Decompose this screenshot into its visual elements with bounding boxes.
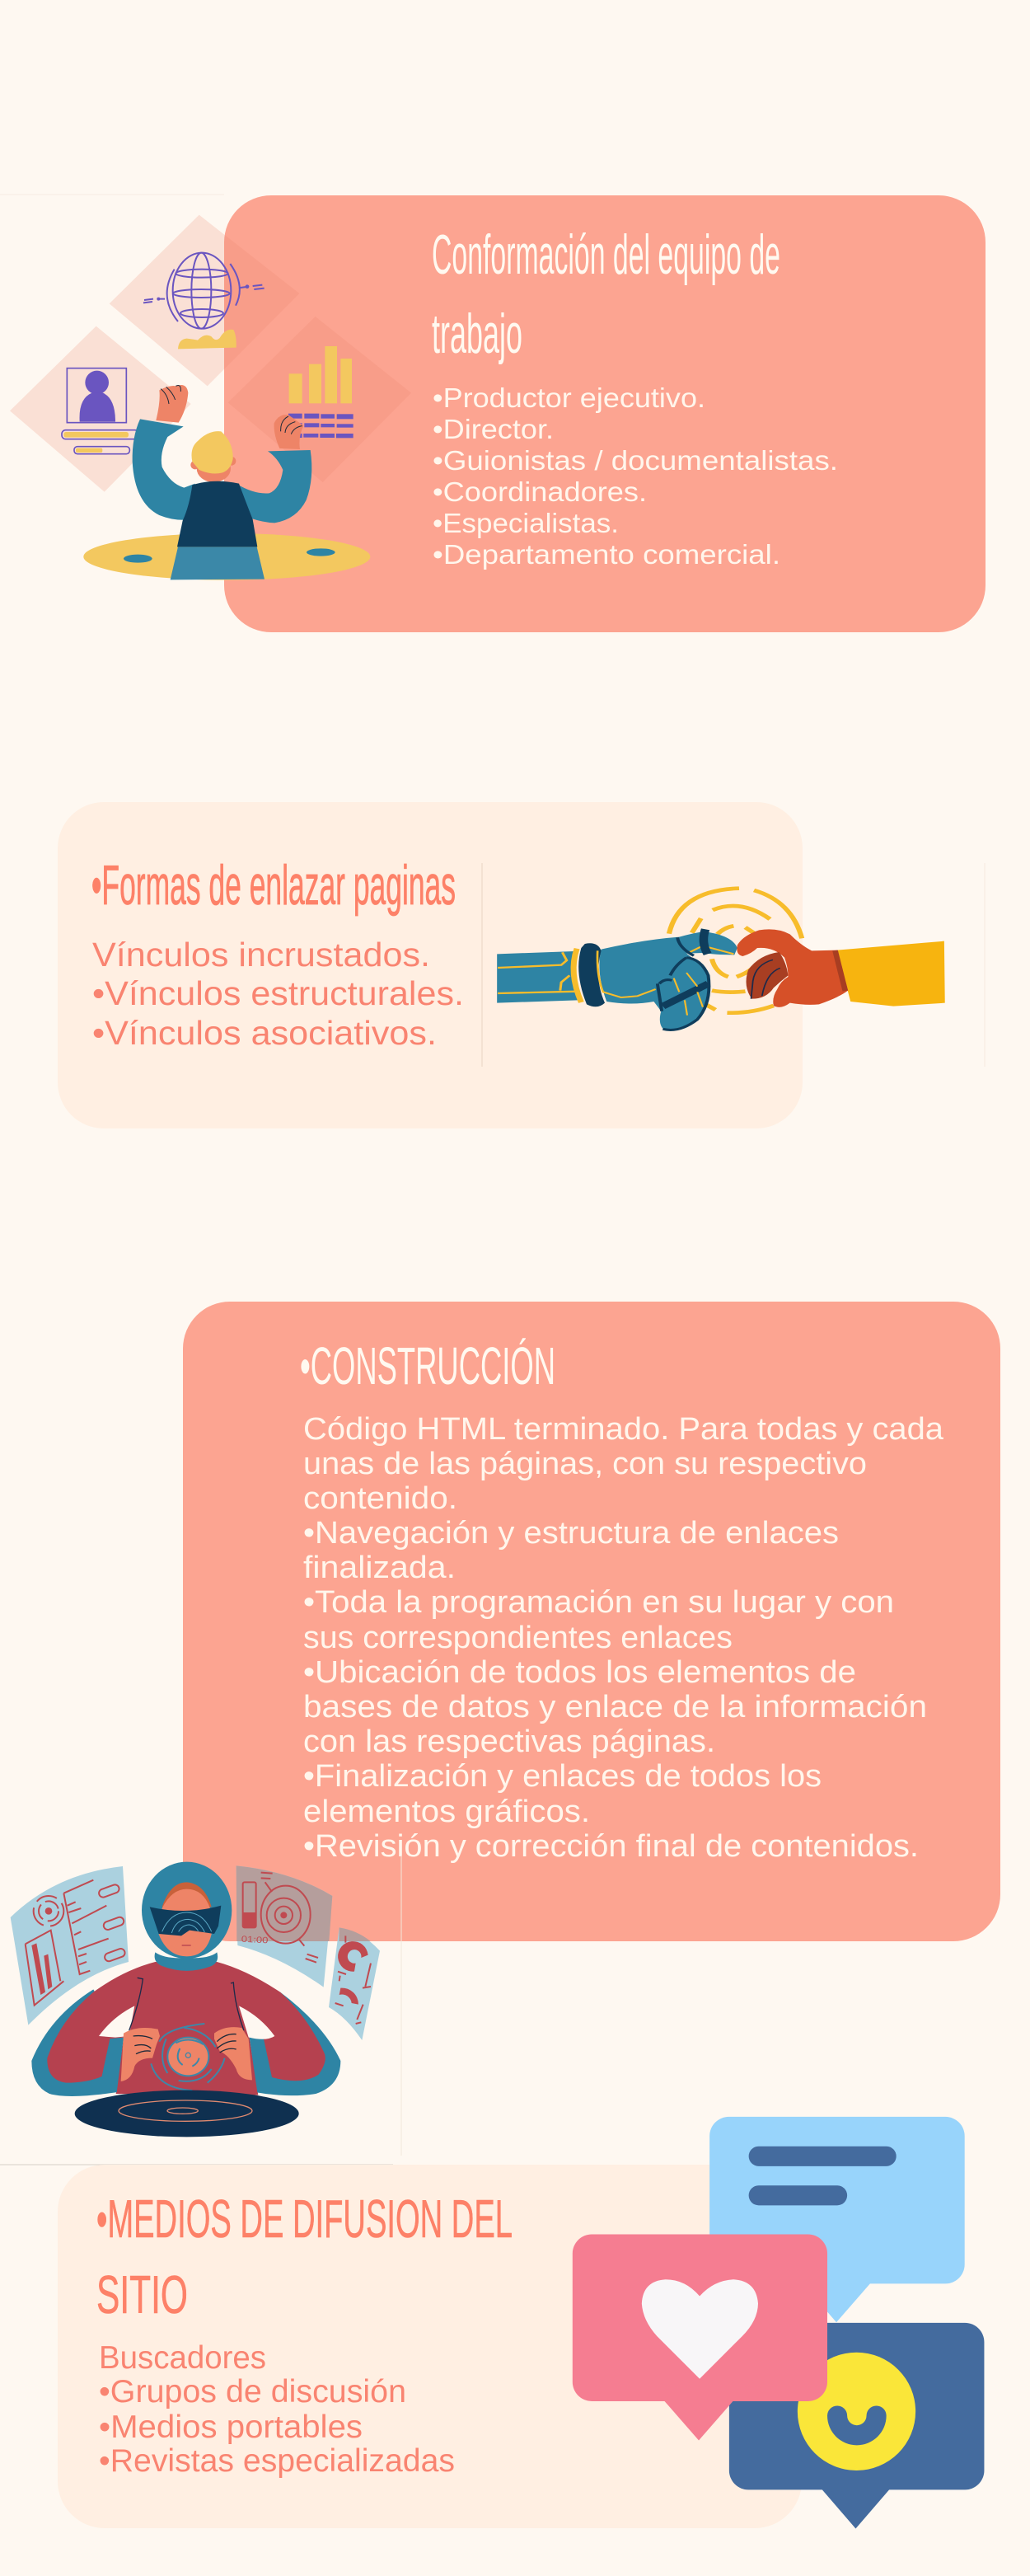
text block: construction checklist: con las respectivas páginas. [303, 1724, 715, 1759]
chart: left holographic screen [11, 1866, 129, 2025]
heading: conformación del equipo de trabajo [432, 223, 780, 365]
list: team roles: •Departamento comercial. [433, 539, 780, 570]
heading: formas de enlazar paginas: •Formas de enlazar paginas [91, 854, 456, 917]
icon: profile diamond [10, 326, 191, 492]
heading: medios de difusion del sitio: SITIO [96, 2264, 188, 2325]
panel: conformación del equipo [224, 195, 986, 632]
illustration: person with floating data screens [10, 215, 411, 580]
list: team roles [433, 382, 838, 570]
heading: medios de difusion del sitio: •MEDIOS DE DIFUSION DEL [96, 2189, 513, 2249]
text block: construction checklist: •Ubicación de todos los elementos de [303, 1655, 856, 1690]
text block: construction checklist: sus correspondientes enlaces [303, 1621, 733, 1655]
text block: construction checklist: contenido. [303, 1481, 457, 1516]
panel background [183, 1302, 1000, 1941]
icon: heart bubble [573, 2234, 827, 2440]
text block: construction checklist [303, 1412, 944, 1864]
text block: construction checklist: finalizada. [303, 1551, 456, 1585]
list: team roles: •Especialistas. [433, 508, 619, 538]
list: medios [99, 2340, 455, 2479]
panel: construcción [183, 1302, 1000, 1941]
panel background [58, 2165, 802, 2528]
text block: construction checklist: •Finalización y enlaces de todos los [303, 1759, 822, 1794]
list: medios: •Revistas especializadas [99, 2443, 455, 2479]
text block: construction checklist: •Revisión y corrección final de contenidos. [303, 1829, 919, 1864]
icon: globe diamond [110, 215, 299, 386]
heading: conformación del equipo de trabajo: trabajo [432, 303, 522, 365]
icon: signal rings [669, 889, 802, 1013]
illustration: person with VR headset and holographic screens [11, 1862, 380, 2137]
text block: construction checklist: •Toda la programación en su lugar y con [303, 1585, 894, 1620]
list: medios: •Medios portables [99, 2409, 363, 2445]
icon: text bubble [709, 2117, 965, 2322]
illustration: human hand [737, 929, 945, 1007]
icon: holographic dial [151, 2024, 225, 2090]
text block: construction checklist: unas de las páginas, con su respectivo [303, 1447, 867, 1481]
list: tipos de vínculos [92, 936, 464, 1052]
chart: centre-right holographic screen [236, 1865, 332, 1987]
illustration: robot hand touching human hand [497, 889, 945, 1031]
list: medios: •Grupos de discusión [99, 2374, 406, 2409]
list: team roles: •Coordinadores. [433, 476, 647, 507]
text block: construction checklist: elementos gráficos. [303, 1795, 590, 1829]
text block: construction checklist: Código HTML terminado. Para todas y cada [303, 1412, 944, 1447]
illustration: dark round table [75, 2090, 299, 2137]
illustration: yellow table [83, 533, 370, 580]
list: medios: Buscadores [99, 2340, 266, 2376]
panel background [58, 802, 803, 1128]
list: team roles: •Guionistas / documentalistas. [433, 445, 838, 476]
list: tipos de vínculos: Vínculos incrustados. [92, 936, 430, 974]
illustration: VR person [31, 1862, 340, 2096]
panel: formas de enlazar paginas [58, 802, 803, 1128]
heading: medios de difusion del sitio [96, 2189, 513, 2325]
list: tipos de vínculos: •Vínculos estructurales. [92, 974, 464, 1012]
heading: construcción: •CONSTRUCCIÓN [300, 1336, 555, 1396]
text block: construction checklist: bases de datos y enlace de la información [303, 1690, 927, 1724]
illustration: robot arm [497, 929, 737, 1031]
chart: far right holographic screen [329, 1927, 380, 2040]
panel background [224, 195, 986, 632]
label: timer: 01:00 [241, 1935, 269, 1945]
list: tipos de vínculos: •Vínculos asociativos. [92, 1014, 437, 1052]
icon: bar chart diamond [228, 317, 411, 482]
list: team roles: •Director. [433, 414, 554, 444]
panel: medios de difusión [58, 2165, 802, 2528]
icon: smiley bubble [729, 2323, 984, 2529]
text block: construction checklist: •Navegación y estructura de enlaces [303, 1516, 839, 1551]
illustration: chat bubbles [573, 2117, 984, 2529]
list: team roles: •Productor ejecutivo. [433, 382, 705, 413]
illustration: person from behind [133, 385, 311, 579]
